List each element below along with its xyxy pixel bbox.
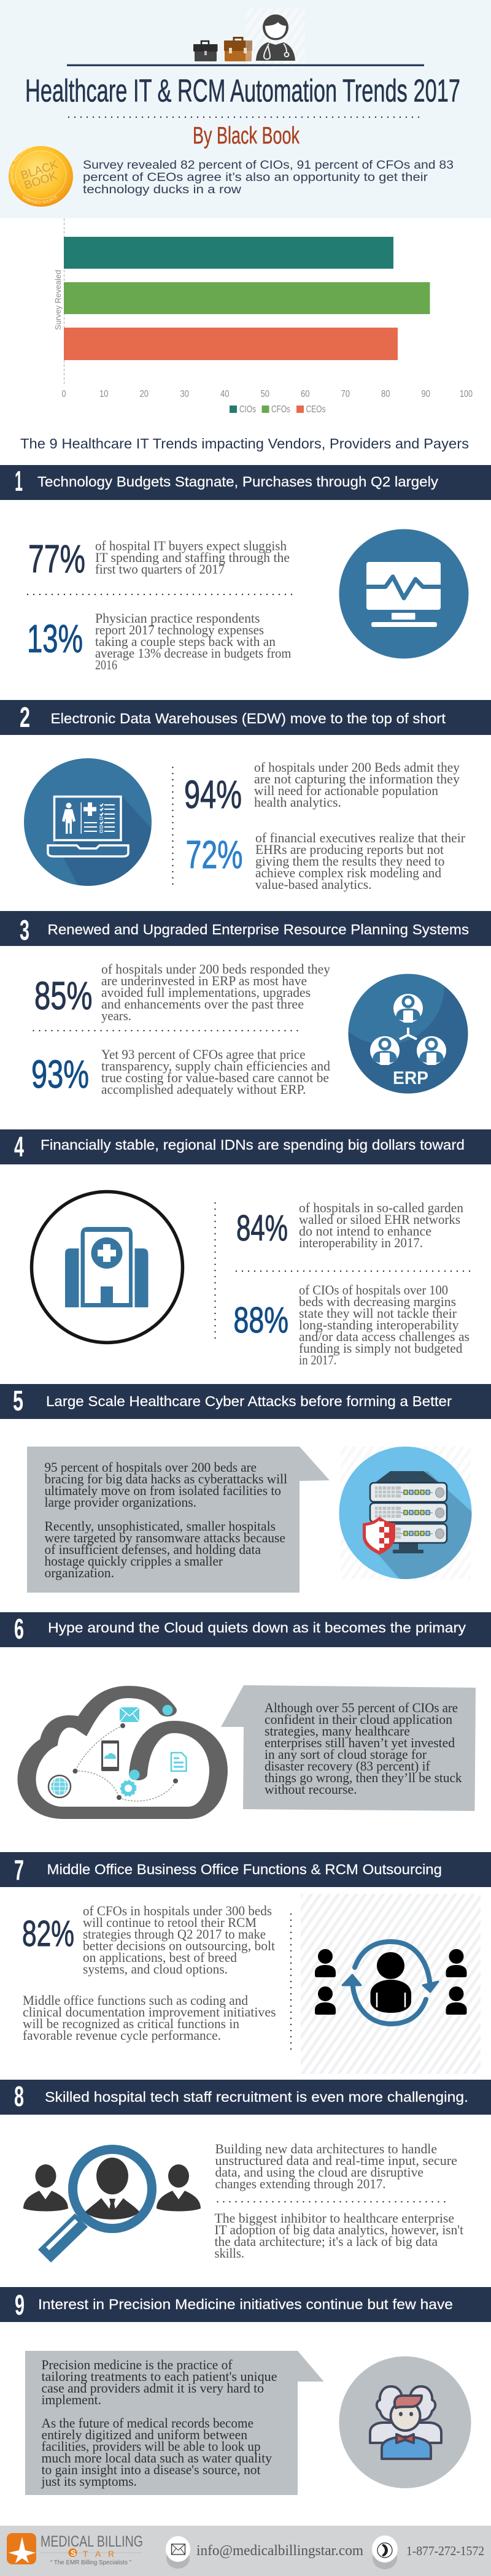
- stat: 13%: Physician practice respondents: [95, 610, 260, 626]
- icon: outsourcing people and arrows: [301, 1894, 481, 2074]
- stat: 88%: 88%: [233, 1300, 288, 1340]
- stat: 84%: walled or siloed EHR networks: [299, 1212, 460, 1227]
- stat: 13%: taking a couple steps back with an: [95, 634, 276, 649]
- section 5 header: [0, 1384, 491, 1419]
- logo: Medical Billing Star: “ The EMR Billing Specialists ”: [50, 2559, 131, 2566]
- logo: Medical Billing Star: T: [83, 2549, 88, 2559]
- stat: 72%: achieve complex risk modeling and: [255, 865, 441, 880]
- axis tick labels: 0: [61, 389, 66, 399]
- bar: CFOs 91: [64, 282, 430, 314]
- stat: 85%: years.: [101, 1008, 131, 1023]
- callout: cloud: strategies, many healthcare: [265, 1723, 410, 1739]
- legend: CEOs: [306, 404, 325, 415]
- section 5 header: 5: [13, 1385, 23, 1417]
- callout: precision medicine: implement.: [42, 2392, 101, 2407]
- section 1 header: [0, 465, 491, 500]
- section 6 header: 6: [14, 1613, 24, 1645]
- byline: By Black Book: [193, 123, 300, 149]
- stat: 94%: will need for actionable population: [254, 783, 438, 798]
- stat: 94%: are not capturing the information they: [254, 771, 460, 786]
- axis tick labels: 80: [381, 389, 390, 399]
- text: middle office: will be recognized as critical functions in: [23, 2016, 239, 2031]
- callout: cyber attacks: 95 percent of hospitals over 200 beds are: [44, 1459, 257, 1475]
- stat: 94%: of hospitals under 200 Beds admit they: [254, 759, 460, 775]
- text: skills: data, and using the cloud are disruptive: [215, 2164, 423, 2180]
- intro text: [83, 159, 454, 196]
- legend: CIOs: [239, 404, 256, 415]
- bar: CEOs 83: [64, 328, 398, 360]
- icon: ERP network: ERP: [393, 1068, 428, 1088]
- axis tick labels: 40: [220, 389, 230, 399]
- stat: 13%: report 2017 technology expenses: [95, 622, 264, 637]
- icon: email button: [166, 2536, 190, 2569]
- axis tick labels: 10: [99, 389, 109, 399]
- text: skills: [215, 2141, 463, 2261]
- stat: 13%: 2016: [95, 657, 117, 672]
- section 2 header: Electronic Data Warehouses (EDW) move to the top of short: [50, 710, 446, 726]
- callout: cyber attacks: organization.: [44, 1565, 114, 1580]
- section 3 header: Renewed and Upgraded Enterprise Resource Planning Systems: [48, 921, 469, 937]
- icon: server rack with shield: [339, 1447, 476, 1589]
- stat: 82%: systems, and cloud options.: [83, 1961, 228, 1977]
- section 8 header: Skilled hospital tech staff recruitment is even more challenging.: [45, 2089, 468, 2105]
- icon: brown briefcase: [224, 38, 252, 61]
- icon: Black Book gold medal: IMPARTIAL ACCURATE: [10, 146, 32, 185]
- icon: patient figure: [339, 2356, 471, 2488]
- stat: 88%: of CIOs of hospitals over 100: [299, 1282, 448, 1298]
- stat: 84%: do not intend to enhance: [299, 1223, 431, 1239]
- header panel: [0, 0, 491, 218]
- section 5 header: Large Scale Healthcare Cyber Attacks before forming a Better: [46, 1393, 452, 1409]
- stat: 93%: accomplished adequately without ERP.: [101, 1082, 306, 1097]
- icon: phone button: [372, 2536, 398, 2569]
- stat: 77%: IT spending and staffing through the: [95, 550, 290, 565]
- text: skills: the data architecture; it's a lack of big data: [215, 2234, 438, 2249]
- text: skills: unstructured data and real-time input, secure: [215, 2153, 457, 2168]
- stat: 77%: of hospital IT buyers expect sluggish: [95, 538, 287, 553]
- axis title: Survey Revealed: [53, 270, 63, 330]
- section 3 header: [0, 911, 491, 946]
- stat: 77%: 77%: [28, 537, 85, 581]
- section 8 header: 8: [14, 2080, 24, 2112]
- icon: ERP network: [349, 974, 468, 1093]
- section 4 header: Financially stable, regional IDNs are spending big dollars toward: [41, 1137, 465, 1153]
- logo: Medical Billing Star: [7, 2533, 143, 2566]
- legend: [230, 404, 325, 415]
- stat: 82%: 82%: [22, 1913, 74, 1954]
- callout: cloud: [221, 1685, 476, 1811]
- icon: cloud with apps: [27, 1692, 218, 1813]
- section 7 header: [0, 1852, 491, 1887]
- stat: 85%: and enhancements over the past three: [101, 996, 304, 1012]
- stat: 13%: 13%: [27, 617, 83, 661]
- stat: 93%: 93%: [31, 1052, 89, 1096]
- stat: 85%: 85%: [34, 974, 92, 1018]
- stat: 82%: strategies through Q2 2017 to make: [83, 1926, 266, 1942]
- axis tick labels: 20: [140, 389, 149, 399]
- stat: 77%: first two quarters of 2017: [95, 561, 225, 577]
- intro text: technology ducks in a row: [83, 183, 241, 196]
- stat: 82%: will continue to retool their RCM: [83, 1915, 257, 1930]
- callout: cyber attacks: Recently, unsophisticated, smaller hospitals: [44, 1518, 276, 1534]
- axis tick labels: 60: [301, 389, 310, 399]
- callout: cloud: without recourse.: [265, 1782, 357, 1797]
- section 2 header: 2: [20, 701, 30, 733]
- stat: 84%: interoperability in 2017.: [299, 1235, 423, 1250]
- axis tick labels: [61, 389, 473, 399]
- stat: 13%: average 13% decrease in budgets from: [95, 645, 291, 661]
- stat: 88%: and/or data access challenges as: [299, 1329, 470, 1344]
- stat: 94%: health analytics.: [254, 794, 341, 810]
- callout: precision medicine: entirely digitized and uniform between: [42, 2427, 247, 2442]
- stat: 82%: of CFOs in hospitals under 300 beds: [83, 1903, 272, 1918]
- axis tick labels: 90: [421, 389, 430, 399]
- section 9 header: Interest in Precision Medicine initiatives continue but few have: [38, 2296, 453, 2312]
- stat: 93%: Yet 93 percent of CFOs agree that price: [101, 1047, 306, 1062]
- stat: 82%: [22, 1903, 275, 1977]
- stat: 85%: avoided full implementations, upgrades: [101, 985, 311, 1000]
- logo: Medical Billing Star: MEDICAL BILLING: [41, 2533, 143, 2550]
- logo: Medical Billing Star: A: [95, 2549, 101, 2559]
- stat: 88%: [233, 1282, 470, 1367]
- text: middle office: favorable revenue cycle performance.: [23, 2028, 221, 2043]
- callout: precision medicine: tailoring treatments to each patient's unique: [42, 2369, 277, 2384]
- stat: 93%: transparency, supply chain efficiencies and: [101, 1058, 330, 1074]
- stat: 88%: funding is simply not budgeted: [299, 1340, 463, 1356]
- section 9 header: 9: [15, 2289, 25, 2321]
- logo: Medical Billing Star: S: [71, 2548, 76, 2558]
- callout: precision medicine: As the future of medical records become: [42, 2415, 253, 2431]
- stat: 85%: [34, 961, 330, 1023]
- stat: 94%: 94%: [184, 772, 242, 817]
- phone number: 1-877-272-1572: [406, 2543, 484, 2558]
- callout: precision medicine: just its symptoms.: [41, 2474, 137, 2489]
- stat: 88%: long-standing interoperability: [299, 1317, 459, 1332]
- axis tick labels: 30: [180, 389, 189, 399]
- stat: 72%: [185, 830, 466, 892]
- axis tick labels: 70: [341, 389, 350, 399]
- callout: cyber attacks: [27, 1447, 330, 1593]
- icon: Black Book gold medal: BLACK: [19, 158, 60, 182]
- text: skills: skills.: [215, 2245, 244, 2261]
- footer: [0, 2526, 491, 2576]
- callout: cyber attacks: ultimately move on from isolated facilities to: [44, 1483, 281, 1498]
- callout: cyber attacks: bracing for big data hacks as cyberattacks will: [44, 1471, 287, 1486]
- callout: precision medicine: case and providers admit it is very hard to: [42, 2380, 264, 2396]
- axis tick labels: 50: [260, 389, 269, 399]
- icon: magnifier over candidates: [23, 2150, 201, 2263]
- stat: 88%: beds with decreasing margins: [299, 1294, 456, 1309]
- section 7 header: 7: [14, 1854, 24, 1886]
- bar: CIOs 82: [64, 237, 393, 269]
- stat: 82%: better decisions on outsourcing, bolt: [83, 1938, 275, 1953]
- text: middle office: Middle office functions such as coding and: [23, 1993, 248, 2008]
- stat: 13%: [27, 610, 291, 672]
- text: skills: changes extending through 2017.: [215, 2176, 385, 2191]
- callout: precision medicine: [25, 2351, 324, 2495]
- intro text: percent of CEOs agree it’s also an opportunity to get their: [83, 171, 428, 184]
- text: skills: Building new data architectures to handle: [215, 2141, 437, 2156]
- email address: info@medicalbillingstar.com: [196, 2543, 363, 2559]
- section 3 header: 3: [20, 914, 29, 946]
- stat: 94%: [184, 759, 460, 817]
- text: skills: IT adoption of big data analytics, however, isn't: [215, 2222, 463, 2237]
- callout: cloud: disaster recovery (83 percent) if: [265, 1758, 430, 1774]
- callout: precision medicine: to gain insight into a disease's source, not: [42, 2462, 260, 2477]
- subheading: The 9 Healthcare IT Trends impacting Vendors, Providers and Payers: [20, 436, 469, 452]
- icon: Black Book gold medal: BOOK: [23, 169, 59, 192]
- callout: cloud: in any sort of cloud storage for: [265, 1747, 427, 1762]
- callout: precision medicine: facilities, providers will be able to look up: [42, 2439, 260, 2454]
- section 9 header: [0, 2287, 491, 2322]
- logo: Medical Billing Star: R: [108, 2549, 114, 2559]
- callout: cyber attacks: of insufficient defenses, and holding data: [44, 1542, 261, 1557]
- callout: precision medicine: Precision medicine is the practice of: [42, 2357, 233, 2372]
- callout: cloud: Although over 55 percent of CIOs are: [265, 1700, 458, 1715]
- icon: hospital building in ring: [32, 1191, 183, 1342]
- callout: cyber attacks: large provider organizations.: [44, 1494, 196, 1510]
- stat: 72%: of financial executives realize that their: [255, 830, 466, 845]
- icon: doctor with stethoscope: [246, 9, 305, 67]
- section 6 header: Hype around the Cloud quiets down as it becomes the primary: [48, 1620, 466, 1636]
- stat: 84%: of hospitals in so-called garden: [299, 1200, 463, 1215]
- icon: Black Book gold medal: [9, 146, 73, 207]
- legend: CFOs: [271, 404, 290, 415]
- stat: 77%: [28, 537, 290, 581]
- callout: cloud: things go wrong, then they’ll be stuck: [265, 1770, 462, 1785]
- stat: 82%: on applications, best of breed: [83, 1950, 237, 1965]
- icon: laptop with patient chart: [24, 758, 152, 886]
- axis tick labels: 100: [460, 389, 473, 399]
- bar chart: survey revealed: [53, 218, 473, 415]
- icon: Black Book gold medal: UNBIASED SOURCE: [22, 195, 58, 204]
- stat: 93%: true costing for value-based care cannot be: [101, 1070, 329, 1085]
- text: skills: The biggest inhibitor to healthcare enterprise: [215, 2210, 454, 2226]
- section 4 header: 4: [14, 1131, 24, 1163]
- section 8 header: [0, 2080, 491, 2115]
- callout: cyber attacks: were targeted by ransomware attacks because: [44, 1530, 285, 1545]
- stat: 88%: state they will not tackle their: [299, 1305, 457, 1321]
- section 4 header: [0, 1129, 491, 1164]
- section 2 header: [0, 700, 491, 735]
- section 1 header: Technology Budgets Stagnate, Purchases through Q2 largely: [37, 474, 439, 490]
- intro text: Survey revealed 82 percent of CIOs, 91 percent of CFOs and 83: [83, 159, 454, 172]
- icon: black briefcase: [193, 41, 217, 61]
- stat: 88%: in 2017.: [299, 1352, 336, 1367]
- stat: 84%: [236, 1200, 463, 1250]
- stat: 93%: [31, 1047, 330, 1097]
- text: middle office: [23, 1993, 276, 2043]
- stat: 72%: 72%: [185, 832, 243, 877]
- callout: cyber attacks: hostage quickly cripples a smaller: [44, 1553, 223, 1569]
- stat: 85%: are underinvested in ERP as most have: [101, 973, 307, 988]
- icon: monitor with heartbeat: [339, 529, 469, 659]
- section 7 header: Middle Office Business Office Functions & RCM Outsourcing: [47, 1861, 442, 1877]
- callout: precision medicine: much more local data such as water quality: [42, 2450, 272, 2466]
- section 1 header: 1: [15, 465, 23, 497]
- callout: cloud: confident in their cloud application: [265, 1712, 452, 1727]
- stat: 85%: of hospitals under 200 beds responded they: [101, 961, 330, 977]
- section 6 header: [0, 1612, 491, 1647]
- text: middle office: clinical documentation improvement initiatives: [23, 2004, 276, 2020]
- callout: cloud: enterprises still haven’t yet invested: [265, 1735, 455, 1750]
- stat: 72%: EHRs are producing reports but not: [255, 842, 444, 857]
- stat: 84%: 84%: [236, 1208, 288, 1248]
- stat: 72%: giving them the results they need to: [255, 853, 444, 869]
- stat: 72%: value-based analytics.: [255, 877, 372, 892]
